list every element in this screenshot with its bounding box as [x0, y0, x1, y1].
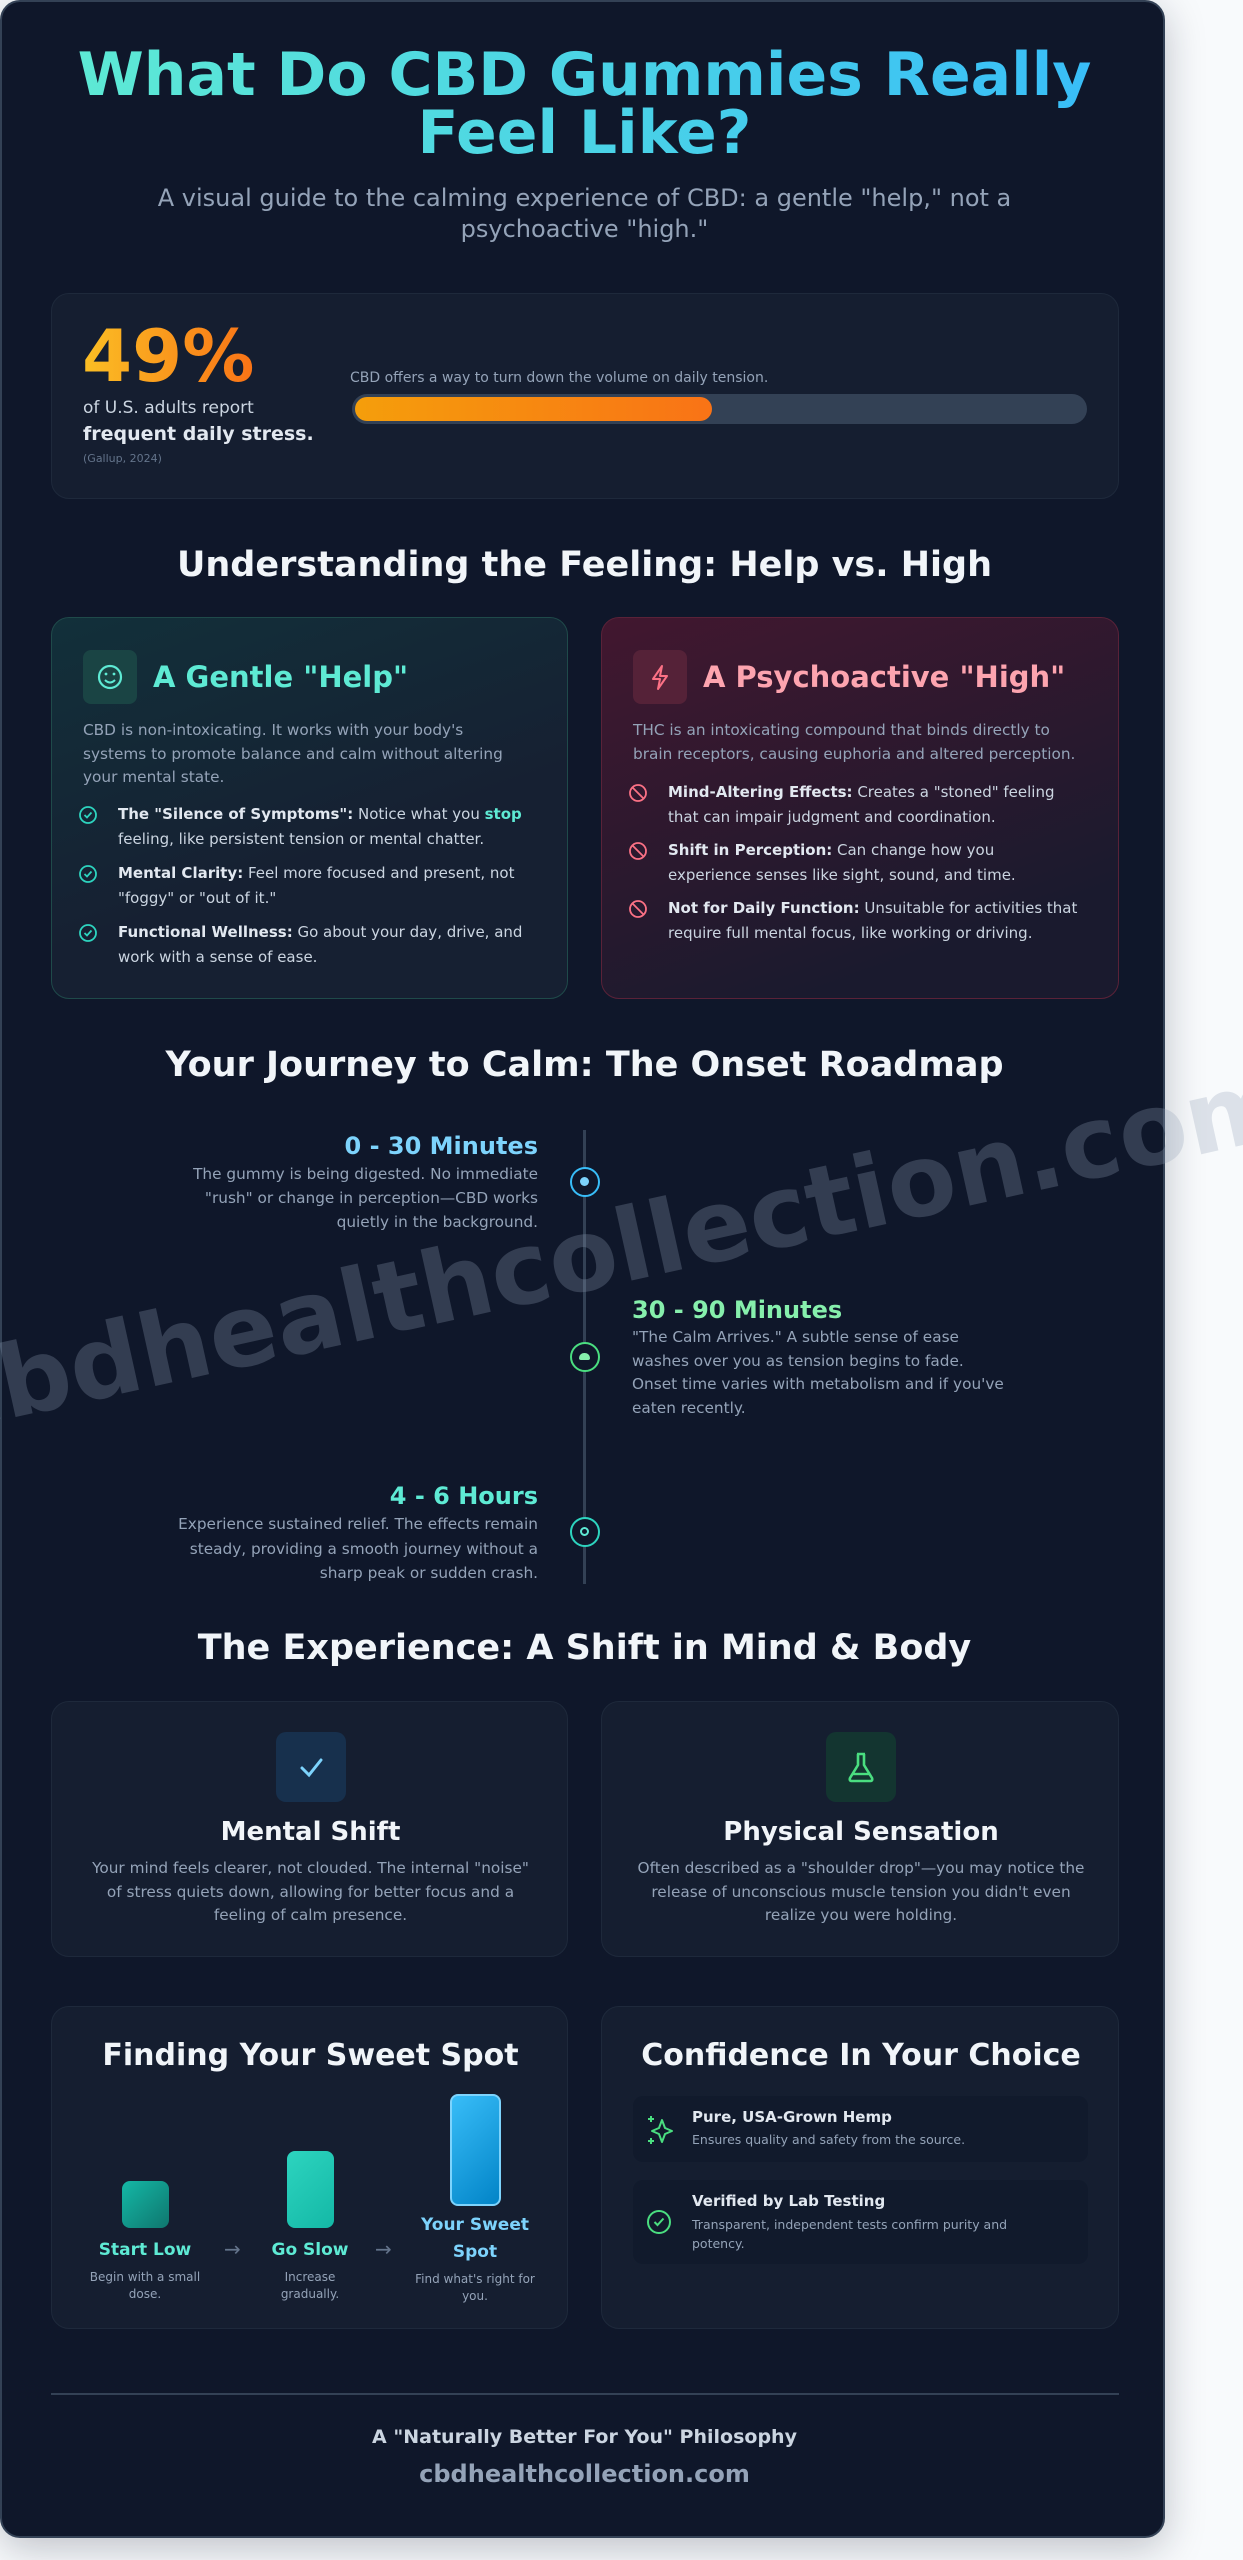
node: 0-30	[570, 1167, 600, 1197]
item: hemp: Pure, USA-Grown Hemp	[692, 2108, 892, 2126]
panel: sweet spot	[51, 2006, 568, 2329]
step: 30-90 minutes: "The Calm Arrives." A subtle sense of ease washes over you as tension begins to fade. Onset time varies with metabolism and if you've eaten recently.	[632, 1328, 1004, 1416]
subtitle: A visual guide to the calming experience of CBD: a gentle "help," not a psychoactive "high."	[158, 184, 1011, 243]
arrow: →	[375, 2237, 392, 2261]
step: start low: Begin with a small dose.	[90, 2270, 200, 2301]
bullet: silence: The "Silence of Symptoms": Notice what you stop feeling, like persistent tension or mental chatter.	[118, 805, 522, 848]
stat text: frequent daily stress.	[83, 423, 314, 445]
panel: mental shift	[51, 1701, 568, 1957]
text: Often described as a "shoulder drop"—you may notice the release of unconscious muscle tension you didn't even realize you were holding.	[638, 1859, 1084, 1924]
stat text	[83, 398, 314, 445]
footer tagline: A "Naturally Better For You" Philosophy	[372, 2426, 797, 2448]
stat text: of U.S. adults report	[83, 398, 254, 418]
icon: sparkle	[648, 2116, 673, 2144]
panel: stat	[51, 293, 1119, 499]
bullet: perception: Shift in Perception: Can change how you experience senses like sight, sound, and time.	[668, 841, 1016, 884]
step: go slow: Go Slow	[271, 2240, 348, 2260]
bullet: clarity: Mental Clarity: Feel more focused and present, not "foggy" or "out of it."	[118, 864, 514, 906]
bullet list	[629, 783, 1078, 942]
item: lab testing: Verified by Lab Testing	[692, 2192, 885, 2210]
heading: A Gentle "Help"	[153, 660, 408, 694]
text: Your mind feels clearer, not clouded. The internal "noise" of stress quiets down, allowing for better focus and a feeling of calm presence.	[92, 1859, 529, 1924]
step: 4-6 hours	[178, 1482, 538, 1582]
footer url: cbdhealthcollection.com	[419, 2460, 750, 2488]
step: sweet spot: Find what's right for you.	[415, 2272, 535, 2303]
item: lab testing	[633, 2180, 1088, 2264]
step: 30-90 minutes: 30 - 90 Minutes	[632, 1296, 842, 1324]
step: go slow	[271, 2151, 348, 2301]
step: start low	[90, 2181, 200, 2301]
step: 0-30 minutes: The gummy is being digested. No immediate "rush" or change in perception—CBD works quietly in the background.	[193, 1165, 538, 1231]
divider	[51, 2393, 1119, 2394]
panel: psychoactive high	[601, 617, 1119, 999]
icon: bolt	[633, 650, 687, 704]
item: hemp: Ensures quality and safety from the source.	[692, 2132, 965, 2147]
heading: experience: The Experience: A Shift in Mind & Body	[198, 1628, 971, 1668]
title: Finding Your Sweet Spot	[102, 2038, 519, 2073]
step: 0-30 minutes: 0 - 30 Minutes	[345, 1132, 538, 1160]
stat number: 49%	[82, 314, 254, 398]
title: Mental Shift	[221, 1817, 400, 1847]
step: 4-6 hours: 4 - 6 Hours	[390, 1482, 538, 1510]
title: What Do CBD Gummies Really Feel Like?	[78, 40, 1091, 168]
node: 4-6 hours	[570, 1517, 600, 1547]
heading: roadmap: Your Journey to Calm: The Onset Roadmap	[165, 1045, 1004, 1085]
bar caption: CBD offers a way to turn down the volume on daily tension.	[350, 370, 768, 386]
description: THC is an intoxicating compound that binds directly to brain receptors, causing euphoria and altered perception.	[633, 721, 1075, 762]
bullet: daily function: Not for Daily Function: Unsuitable for activities that require full mental focus, like working or driving.	[668, 899, 1077, 942]
bullet: mind-altering: Mind-Altering Effects: Creates a "stoned" feeling that can impair judgment and coordination.	[668, 783, 1054, 826]
description: CBD is non-intoxicating. It works with your body's systems to promote balance and calm without altering your mental state.	[83, 721, 503, 786]
icon: check	[276, 1732, 346, 1802]
step: 4-6 hours: Experience sustained relief. The effects remain steady, providing a smooth journey without a sharp peak or sudden crash.	[178, 1515, 538, 1582]
icon: flask	[826, 1732, 896, 1802]
title: Physical Sensation	[723, 1817, 999, 1847]
heading: help vs high: Understanding the Feeling: Help vs. High	[177, 545, 992, 585]
step: go slow: Increase gradually.	[281, 2270, 339, 2301]
icon: smiley	[83, 650, 137, 704]
step: sweet spot	[415, 2094, 535, 2303]
heading: A Psychoactive "High"	[703, 660, 1065, 694]
bullet list	[79, 805, 522, 966]
icon: check circle	[647, 2210, 671, 2234]
step: start low: Start Low	[99, 2240, 191, 2260]
panel: gentle help	[51, 617, 568, 999]
panel: confidence	[601, 2006, 1119, 2329]
bar chart	[352, 394, 1087, 424]
source: (Gallup, 2024)	[83, 452, 162, 465]
title: Confidence In Your Choice	[641, 2038, 1081, 2073]
step: sweet spot: Your Sweet Spot	[421, 2215, 529, 2262]
node: 30-90	[570, 1342, 600, 1372]
bullet: wellness: Functional Wellness: Go about your day, drive, and work with a sense of ease.	[118, 923, 522, 966]
item: hemp	[633, 2096, 1088, 2162]
timeline	[178, 1130, 1004, 1584]
step: 0-30 minutes	[193, 1132, 538, 1231]
item: lab testing: Transparent, independent tests confirm purity and potency.	[692, 2217, 1007, 2251]
panel: physical sensation	[601, 1701, 1119, 1957]
arrow: →	[224, 2237, 241, 2261]
